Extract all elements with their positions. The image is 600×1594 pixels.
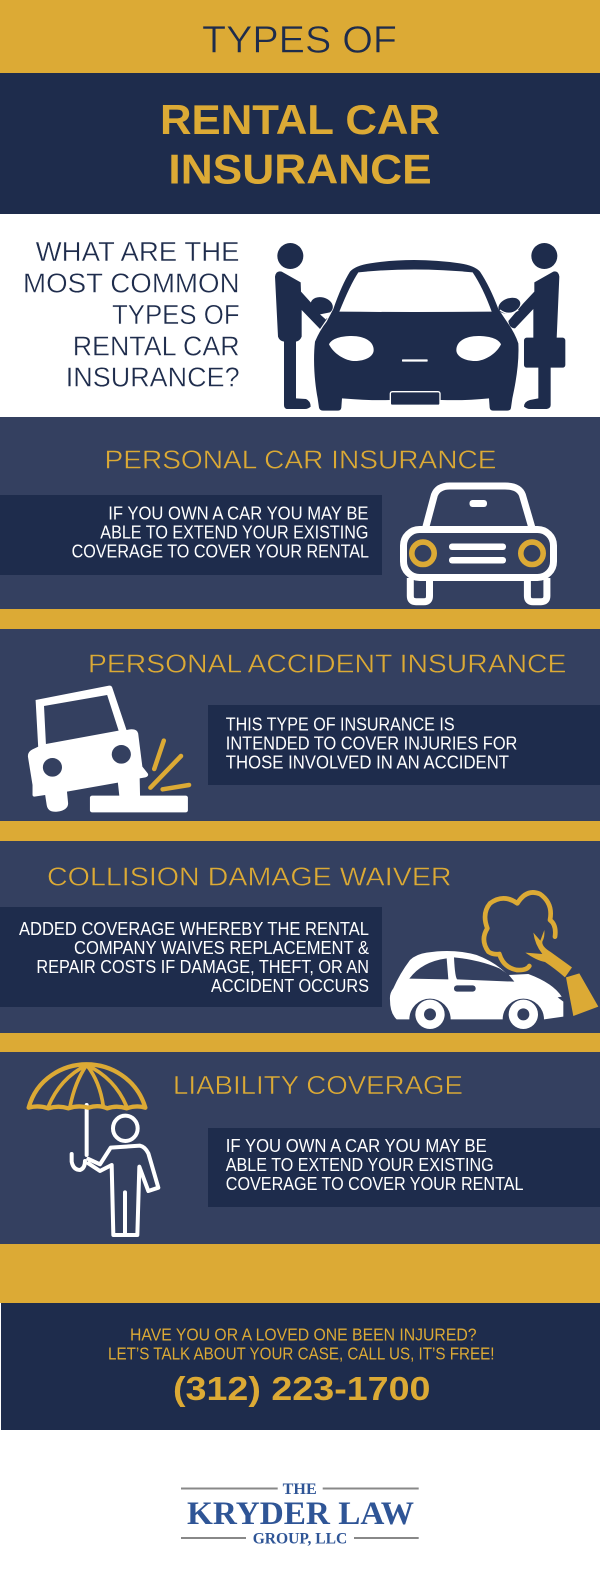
divider band	[0, 609, 600, 629]
description: COVERAGE TO COVER YOUR RENTAL	[72, 541, 369, 561]
title: rental car insurance: INSURANCE	[168, 146, 432, 193]
description: IF YOU OWN A CAR YOU MAY BE	[108, 503, 369, 523]
intro heading	[23, 236, 240, 393]
description: ABLE TO EXTEND YOUR EXISTING	[226, 1155, 494, 1175]
description: ADDED COVERAGE WHEREBY THE RENTAL	[19, 919, 369, 939]
description: INTENDED TO COVER INJURIES FOR	[226, 733, 517, 753]
call to action text: HAVE YOU OR A LOVED ONE BEEN INJURED?	[130, 1325, 477, 1345]
divider band	[0, 1244, 600, 1303]
icon: car hitting curb	[28, 686, 189, 812]
logo: the kryder law group	[181, 1481, 419, 1547]
panel: liability coverage	[0, 1052, 600, 1244]
panel: title banner	[0, 0, 600, 214]
description: THIS TYPE OF INSURANCE IS	[226, 714, 455, 734]
description	[208, 705, 600, 785]
description: REPAIR COSTS IF DAMAGE, THEFT, OR AN	[36, 957, 369, 977]
description	[208, 1128, 600, 1207]
icon: person with umbrella	[29, 1064, 158, 1235]
panel: personal accident insurance	[0, 629, 600, 821]
heading: PERSONAL CAR INSURANCE	[104, 445, 496, 475]
logo: the kryder law group: THE	[283, 1481, 317, 1498]
description: THOSE INVOLVED IN AN ACCIDENT	[226, 752, 509, 772]
call to action text	[108, 1325, 494, 1363]
title: rental car insurance	[160, 96, 440, 193]
panel: collision damage waiver	[0, 841, 600, 1033]
divider band	[0, 1033, 600, 1052]
icon: two people with rental car	[275, 243, 565, 411]
heading: COLLISION DAMAGE WAIVER	[47, 862, 452, 892]
description: COMPANY WAIVES REPLACEMENT &	[74, 938, 369, 958]
logo: the kryder law group: KRYDER LAW	[187, 1496, 414, 1532]
title: rental car insurance: RENTAL CAR	[160, 96, 440, 143]
intro heading: WHAT ARE THE	[36, 236, 240, 267]
intro heading: MOST COMMON	[23, 268, 240, 299]
phone number: (312) 223-1700	[173, 1370, 430, 1407]
divider band	[0, 821, 600, 841]
description: COVERAGE TO COVER YOUR RENTAL	[226, 1174, 524, 1194]
logo: the kryder law group: GROUP, LLC	[253, 1530, 347, 1547]
call to action text: LET’S TALK ABOUT YOUR CASE, CALL US, IT’S FREE!	[108, 1343, 494, 1363]
heading: LIABILITY COVERAGE	[173, 1070, 463, 1100]
description	[0, 495, 382, 575]
description: ABLE TO EXTEND YOUR EXISTING	[100, 522, 369, 542]
heading: PERSONAL ACCIDENT INSURANCE	[88, 649, 566, 679]
title: types of: TYPES OF	[202, 20, 397, 62]
intro heading: TYPES OF	[112, 299, 240, 330]
description: ACCIDENT OCCURS	[211, 976, 369, 996]
icon: front view car outline	[404, 486, 554, 602]
description: IF YOU OWN A CAR YOU MAY BE	[226, 1136, 487, 1156]
panel: call to action	[1, 1303, 600, 1430]
intro heading: INSURANCE?	[66, 362, 240, 393]
icon: smoking car	[390, 892, 598, 1029]
panel: intro question	[23, 236, 565, 411]
intro heading: RENTAL CAR	[73, 331, 240, 362]
description	[0, 907, 382, 1007]
panel: personal car insurance	[0, 417, 600, 609]
